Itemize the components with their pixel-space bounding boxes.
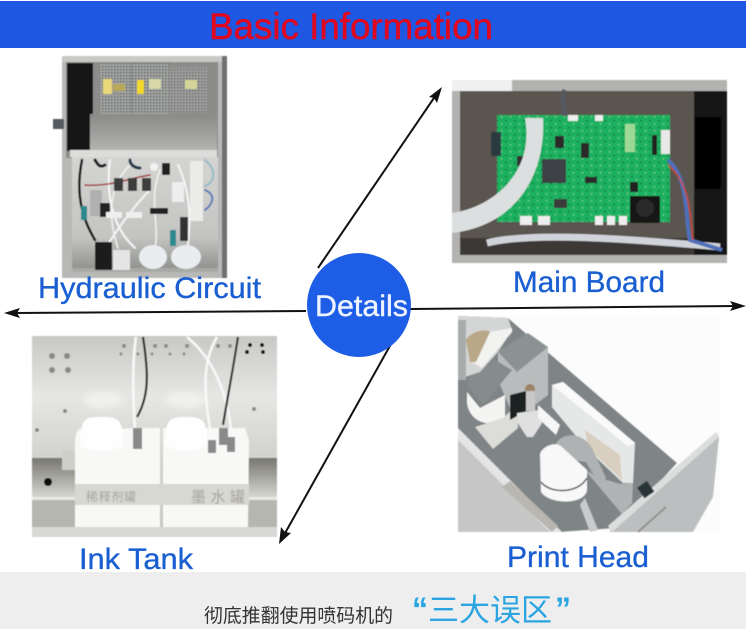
arrow: to print head xyxy=(410,301,746,311)
details circle: Details xyxy=(315,290,408,323)
arrow: to main board xyxy=(318,87,442,268)
footer band xyxy=(0,572,746,629)
label: Print Head: Print Head xyxy=(507,541,649,574)
photo: ink tank xyxy=(32,336,277,537)
footer highlight: 三大误区 xyxy=(428,593,552,628)
photo: print head xyxy=(458,316,720,532)
label: Main Board: Main Board xyxy=(513,266,665,299)
arrow: to ink tank xyxy=(279,344,391,544)
footer text: 彻底推翻使用喷码机的 xyxy=(204,605,393,627)
label: Hydraulic Circuit: Hydraulic Circuit xyxy=(38,272,262,305)
footer highlight: “ xyxy=(412,591,428,627)
header bar xyxy=(0,1,746,48)
photo: hydraulic circuit cabinet xyxy=(53,56,227,278)
details circle xyxy=(307,253,411,357)
arrow: to hydraulic circuit xyxy=(4,308,306,318)
photo: main board xyxy=(452,80,727,263)
tank label band: 墨水罐 xyxy=(191,489,245,506)
circuit board xyxy=(491,115,670,225)
tank label band xyxy=(75,484,249,506)
label: Ink Tank: Ink Tank xyxy=(79,543,194,576)
tank label band: 稀释剂罐 xyxy=(86,489,136,504)
footer highlight: ” xyxy=(555,591,571,627)
title: Basic Information xyxy=(209,6,493,47)
